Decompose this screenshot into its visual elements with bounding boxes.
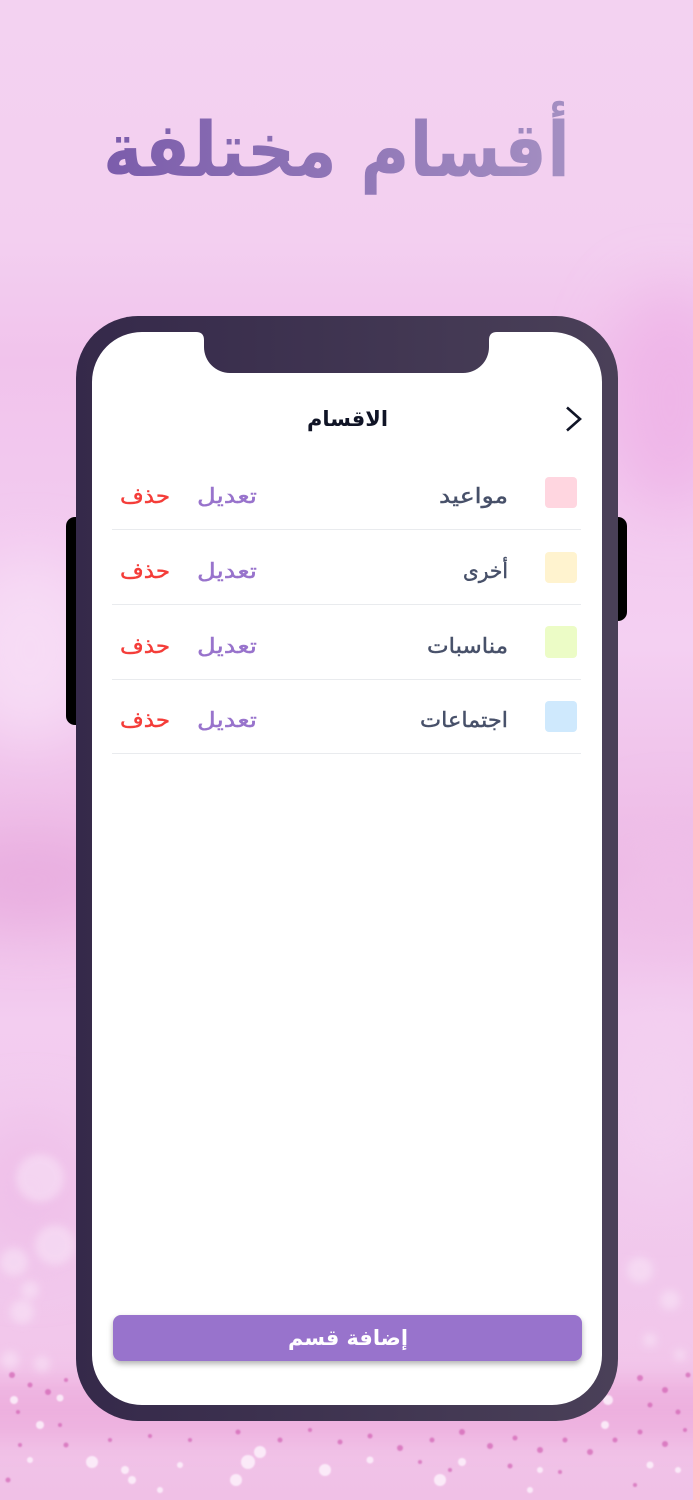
colour swatch pink	[545, 477, 577, 508]
icon: back chevron	[567, 408, 580, 430]
delete action: حذف	[120, 634, 170, 658]
phone frame	[76, 316, 618, 1421]
edit action: تعديل	[197, 708, 257, 732]
left side button	[66, 517, 86, 725]
colour swatch lime	[545, 626, 577, 658]
phone mockup	[66, 316, 627, 1421]
title: أقسام مختلفة	[103, 100, 570, 194]
colour swatch blue	[545, 701, 577, 732]
delete action: حذف	[120, 708, 170, 732]
row: appointments	[120, 477, 577, 508]
edit action: تعديل	[197, 484, 257, 508]
add section button	[113, 1315, 582, 1361]
phone screen	[92, 332, 602, 1405]
right side button	[607, 517, 627, 621]
row: meetings	[120, 701, 577, 732]
row: occasions	[120, 626, 577, 658]
row label: مناسبات	[427, 634, 508, 658]
button label: إضافة قسم	[288, 1326, 408, 1350]
row label: اجتماعات	[420, 708, 508, 732]
delete action: حذف	[120, 484, 170, 508]
screen heading: الاقسام	[307, 407, 388, 431]
delete action: حذف	[120, 559, 170, 583]
row label: أخرى	[463, 557, 508, 583]
edit action: تعديل	[197, 559, 257, 583]
edit action: تعديل	[197, 634, 257, 658]
row label: مواعيد	[439, 484, 508, 508]
row: other	[120, 552, 577, 583]
colour swatch cream	[545, 552, 577, 583]
